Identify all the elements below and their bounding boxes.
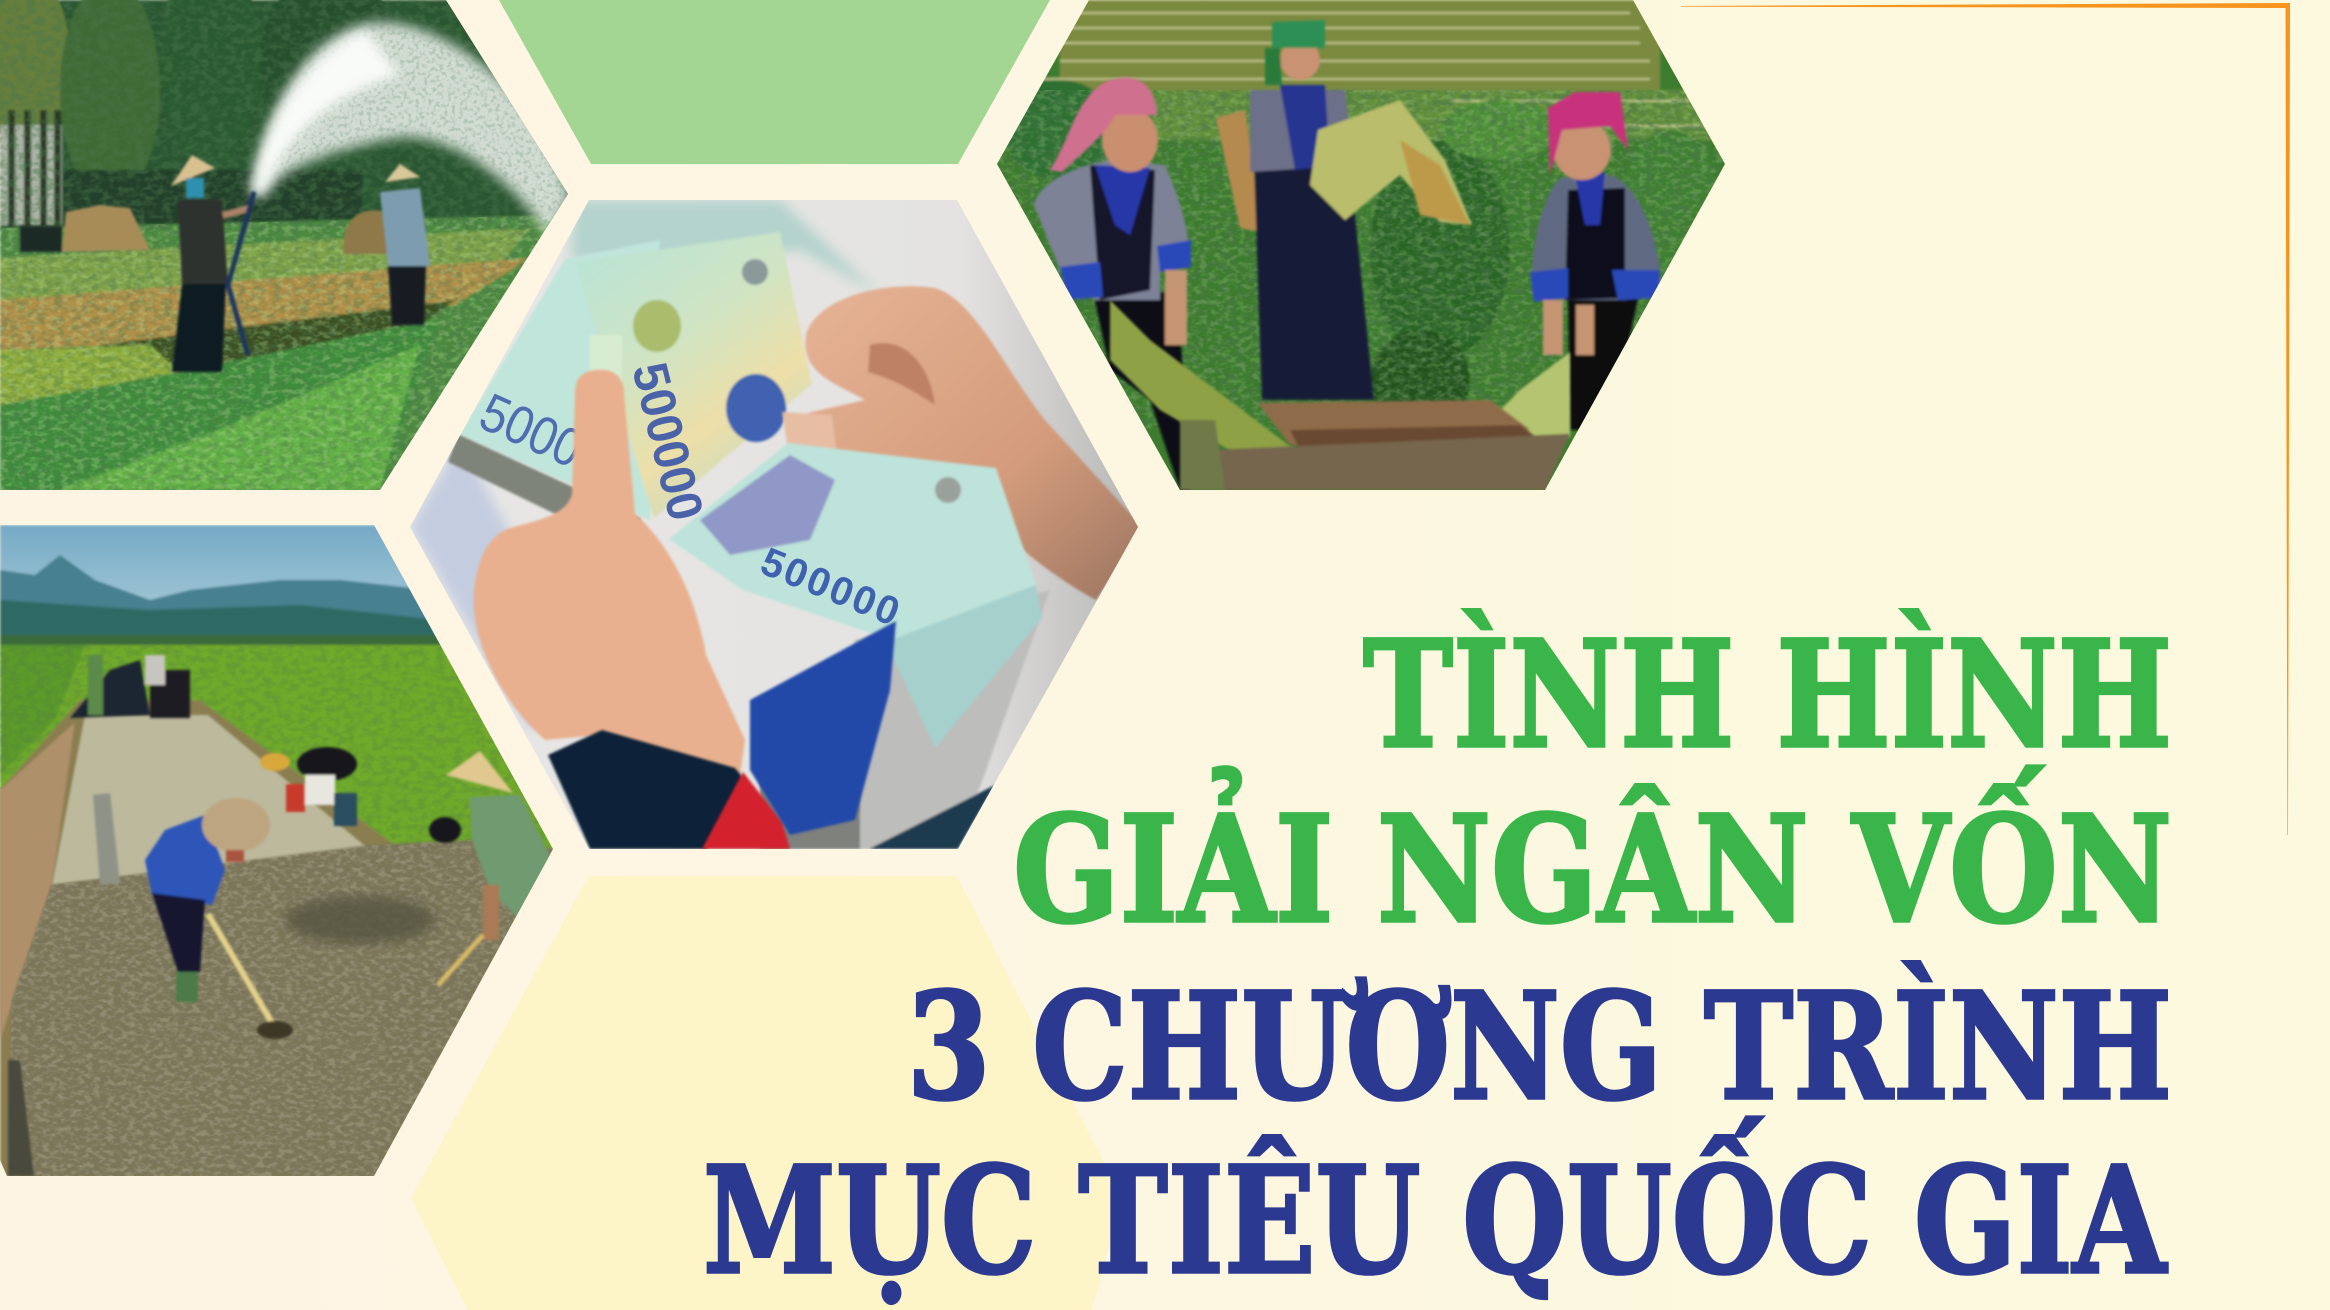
photo: farmers irrigating vegetable field bbox=[0, 0, 580, 500]
farmer with hose bbox=[171, 155, 254, 372]
blurred background notes bbox=[410, 200, 880, 730]
shrub dark texture bbox=[990, 90, 1730, 430]
hay bales bbox=[20, 205, 392, 254]
worker with blue shirt bbox=[145, 798, 293, 1039]
second farmer bbox=[380, 164, 430, 325]
rice field texture bbox=[0, 645, 560, 855]
banknote value: 5000 bbox=[471, 382, 591, 480]
field light texture bbox=[0, 215, 570, 500]
wooden crate bbox=[1180, 400, 1570, 490]
wet concrete bbox=[0, 835, 560, 1180]
title line 1: TÌNH HÌNH bbox=[1363, 608, 2172, 781]
materials: bags, buckets, ladder bbox=[93, 747, 357, 885]
photo: hands counting banknotes bbox=[400, 195, 1145, 855]
rocky road bank bbox=[0, 722, 75, 1040]
finished concrete slab bbox=[52, 715, 371, 885]
worker with camouflage shirt bbox=[429, 751, 552, 985]
title bbox=[703, 608, 2172, 1307]
photo: ethnic women harvesting rice bbox=[990, 0, 1730, 495]
woman left bbox=[1034, 78, 1191, 490]
dark sleeve bbox=[548, 730, 745, 849]
lower banknote value: 500000 bbox=[755, 540, 906, 635]
lower banknote and stack bbox=[669, 443, 1042, 748]
yellow hexagon bbox=[411, 876, 1122, 1310]
field texture bbox=[0, 215, 570, 500]
tree foliage texture bbox=[0, 0, 570, 230]
shrub light texture bbox=[990, 90, 1730, 430]
blue flag bbox=[750, 621, 896, 835]
red fabric bbox=[702, 772, 790, 849]
right hand bbox=[782, 286, 1145, 600]
water spray bbox=[250, 15, 580, 240]
orange corner frame line bbox=[1681, 3, 2290, 835]
banknote value vertical: 500000 bbox=[621, 357, 714, 526]
far workers and tarp bbox=[70, 655, 190, 718]
main banknote bundle bbox=[447, 232, 813, 521]
woman centre with rice bbox=[1216, 20, 1472, 400]
rice bundle right bbox=[1500, 351, 1572, 438]
woman right bbox=[1530, 92, 1662, 430]
grey lower background bbox=[760, 590, 1050, 849]
rice bundle left bbox=[1110, 300, 1295, 462]
left hand bbox=[474, 370, 745, 775]
photo: workers pouring rural concrete road bbox=[0, 525, 560, 1180]
green hexagon bbox=[499, 0, 1050, 164]
